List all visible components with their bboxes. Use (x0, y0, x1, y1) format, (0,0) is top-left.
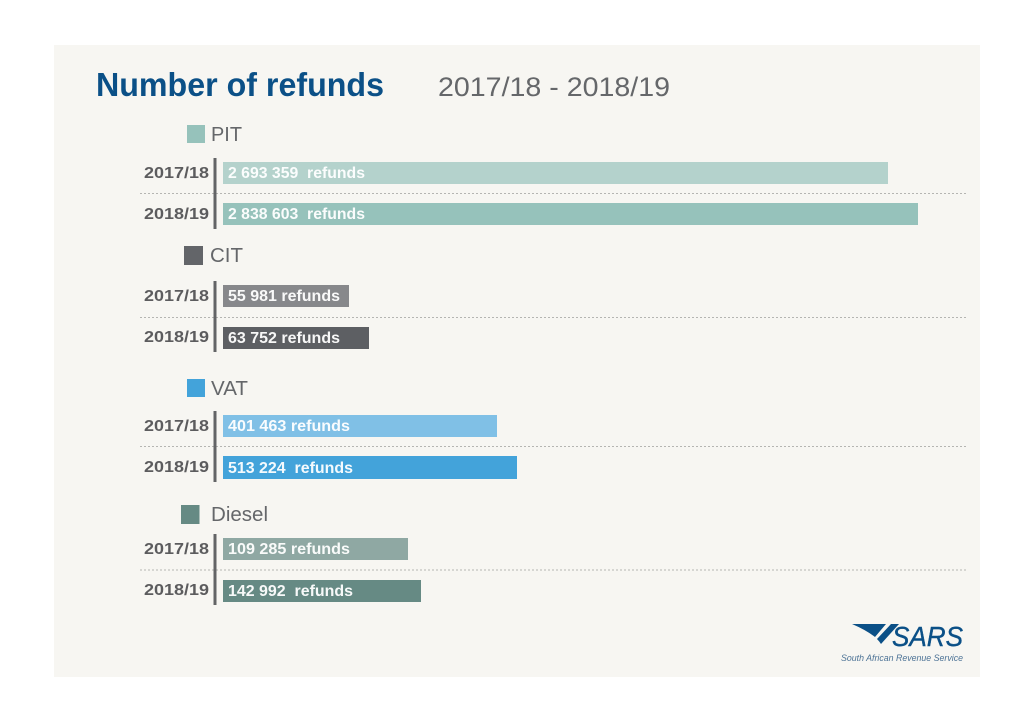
PIT legend swatch (187, 125, 205, 143)
Diesel 2018/19 value: 142 992 refunds (228, 583, 353, 600)
Diesel 2018/19 label: 2018/19 (144, 582, 209, 599)
Diesel 2017/18 label: 2017/18 (144, 541, 209, 558)
VAT heading: VAT (211, 378, 248, 400)
PIT 2017/18 value: 2 693 359 refunds (228, 165, 365, 182)
Diesel 2017/18 value: 109 285 refunds (228, 541, 350, 558)
CIT 2018/19 bar (223, 327, 369, 349)
background panel (54, 45, 980, 677)
PIT axis (214, 158, 216, 229)
CIT legend swatch (184, 246, 203, 265)
logo wordmark: SARS (892, 621, 963, 652)
panel: VAT (140, 378, 966, 482)
CIT 2018/19 label: 2018/19 (144, 329, 209, 346)
VAT 2018/19 value: 513 224 refunds (228, 460, 353, 477)
VAT 2018/19 label: 2018/19 (144, 459, 209, 476)
title: Number of refunds (96, 66, 384, 103)
CIT 2018/19 value: 63 752 refunds (228, 330, 340, 347)
icon: SARS wing mark (852, 624, 899, 644)
CIT 2017/18 value: 55 981 refunds (228, 288, 340, 305)
CIT axis (214, 281, 216, 352)
logo: SARS (841, 621, 963, 663)
VAT axis (214, 411, 216, 482)
CIT 2017/18 label: 2017/18 (144, 288, 209, 305)
PIT 2018/19 bar (223, 203, 918, 225)
Diesel heading: Diesel (211, 504, 268, 526)
Diesel legend swatch (181, 505, 200, 524)
panel: Diesel (140, 504, 966, 605)
panel: CIT (140, 245, 966, 352)
logo tagline: South African Revenue Service (841, 653, 963, 663)
VAT 2017/18 label: 2017/18 (144, 418, 209, 435)
panel: PIT (140, 124, 966, 229)
CIT 2017/18 bar (223, 285, 349, 307)
VAT legend swatch (187, 379, 205, 397)
PIT heading: PIT (211, 124, 242, 146)
Diesel 2017/18 bar (223, 538, 408, 560)
VAT 2018/19 bar (223, 456, 517, 479)
PIT 2017/18 label: 2017/18 (144, 165, 209, 182)
Diesel 2018/19 bar (223, 580, 421, 602)
CIT heading: CIT (210, 245, 243, 267)
subtitle: period: 2017/18 - 2018/19 (438, 72, 670, 102)
PIT 2018/19 value: 2 838 603 refunds (228, 206, 365, 223)
VAT 2017/18 bar (223, 415, 497, 437)
PIT 2018/19 label: 2018/19 (144, 206, 209, 223)
VAT 2017/18 value: 401 463 refunds (228, 418, 350, 435)
PIT 2017/18 bar (223, 162, 888, 184)
Diesel axis (214, 534, 216, 605)
